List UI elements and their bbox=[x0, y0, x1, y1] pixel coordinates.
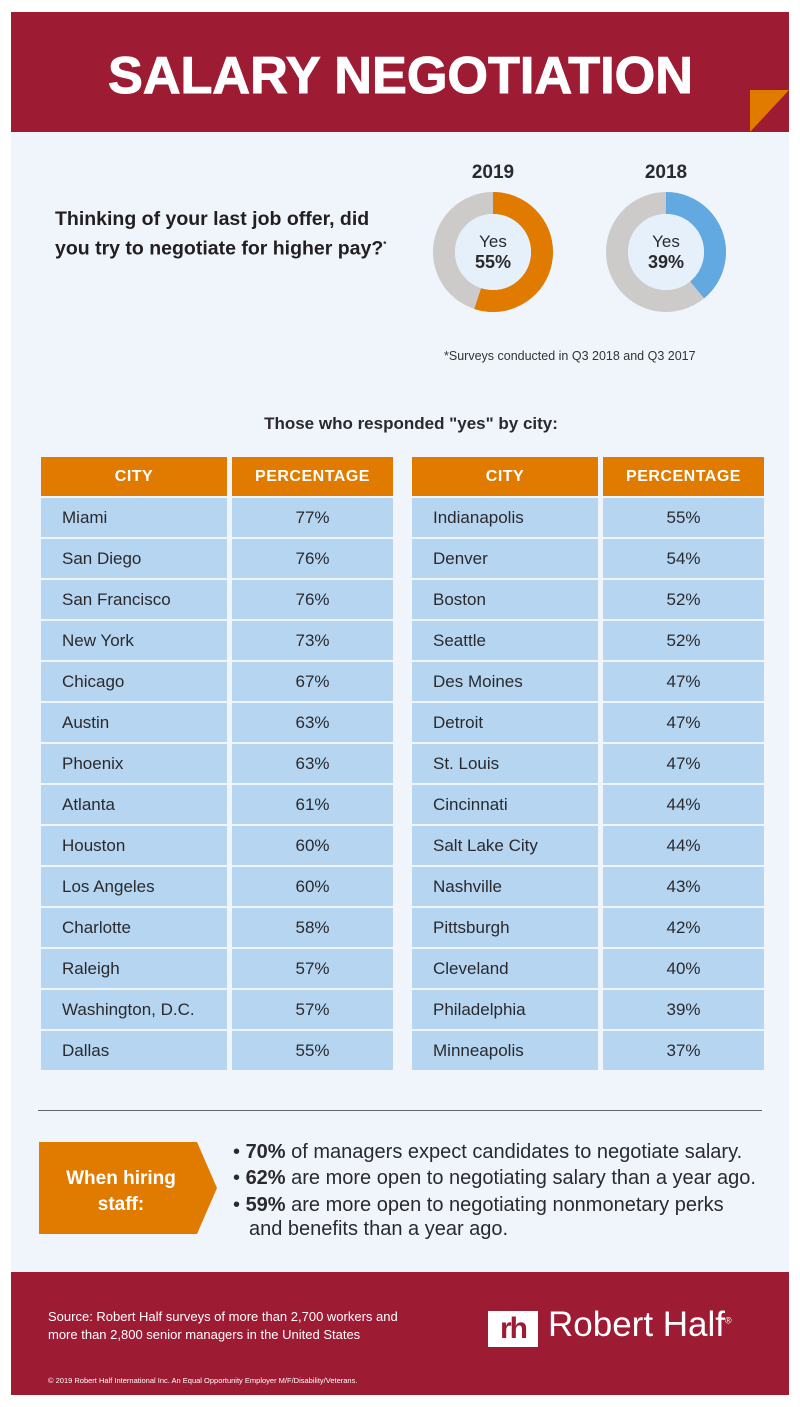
table: right: 52% bbox=[666, 590, 701, 609]
table: right: 40% bbox=[666, 959, 701, 978]
table: right: Boston bbox=[433, 590, 486, 609]
callout: when hiring staff bbox=[39, 1142, 217, 1234]
table: left: 76% bbox=[295, 590, 330, 609]
table: right: 47% bbox=[666, 672, 701, 691]
bullet list: • 62% are more open to negotiating salary than a year ago. bbox=[233, 1167, 756, 1189]
callout: when hiring staff: staff: bbox=[98, 1194, 144, 1215]
table heading: Those who responded "yes" by city: bbox=[264, 414, 558, 433]
table: right: Minneapolis bbox=[433, 1041, 524, 1060]
source text bbox=[48, 1309, 398, 1342]
table: left: Dallas bbox=[62, 1041, 109, 1060]
table: right: 43% bbox=[666, 877, 701, 896]
chart: 2018 donut bbox=[606, 162, 726, 312]
source text: more than 2,800 senior managers in the United States bbox=[48, 1327, 360, 1342]
table: left: 60% bbox=[295, 877, 330, 896]
table: right: Nashville bbox=[433, 877, 502, 896]
source text: Source: Robert Half surveys of more than 2,700 workers and bbox=[48, 1309, 398, 1324]
table: left: PERCENTAGE bbox=[255, 468, 370, 485]
table: left: Austin bbox=[62, 713, 109, 732]
table: right: 44% bbox=[666, 795, 701, 814]
table: left: 55% bbox=[295, 1041, 330, 1060]
header banner bbox=[11, 12, 789, 132]
title: SALARY NEGOTIATION bbox=[108, 47, 693, 105]
table: right: Seattle bbox=[433, 631, 486, 650]
table: right: PERCENTAGE bbox=[626, 468, 741, 485]
table: left: Washington, D.C. bbox=[62, 1000, 195, 1019]
table: left: Atlanta bbox=[62, 795, 115, 814]
copyright: © 2019 Robert Half International Inc. An Equal Opportunity Employer M/F/Disability/Veterans. bbox=[48, 1376, 357, 1385]
logo: rh bbox=[500, 1312, 526, 1345]
chart: 2018 donut: 2018 bbox=[645, 162, 687, 183]
logo: Robert Half® bbox=[548, 1305, 732, 1344]
table: left: 63% bbox=[295, 754, 330, 773]
footnote: *Surveys conducted in Q3 2018 and Q3 2017 bbox=[444, 349, 696, 363]
icon: folded corner bbox=[750, 90, 789, 132]
table: right: CITY bbox=[486, 468, 524, 485]
table: right: 52% bbox=[666, 631, 701, 650]
table: left: Raleigh bbox=[62, 959, 120, 978]
table: right: 39% bbox=[666, 1000, 701, 1019]
table: left: 77% bbox=[295, 508, 330, 527]
bullet list: • 70% of managers expect candidates to negotiate salary. bbox=[233, 1141, 742, 1163]
table: right: 37% bbox=[666, 1041, 701, 1060]
table: right: Pittsburgh bbox=[433, 918, 510, 937]
table: left: CITY bbox=[115, 468, 153, 485]
table: left: 57% bbox=[295, 1000, 330, 1019]
table: right: Philadelphia bbox=[433, 1000, 526, 1019]
table: left bbox=[41, 457, 393, 1070]
question text: you try to negotiate for higher pay?* bbox=[55, 238, 386, 260]
table: right: 42% bbox=[666, 918, 701, 937]
table: left: Phoenix bbox=[62, 754, 123, 773]
bullet list bbox=[233, 1141, 756, 1240]
table: left: 73% bbox=[295, 631, 330, 650]
table: left: Chicago bbox=[62, 672, 124, 691]
table: left: Houston bbox=[62, 836, 125, 855]
table: right: Denver bbox=[433, 549, 488, 568]
table: right: Des Moines bbox=[433, 672, 523, 691]
question text bbox=[55, 208, 386, 260]
table: left: Los Angeles bbox=[62, 877, 155, 896]
chart: 2019 donut: Yes bbox=[479, 232, 507, 251]
table: right: 44% bbox=[666, 836, 701, 855]
logo bbox=[488, 1305, 732, 1347]
table: right bbox=[412, 457, 764, 1070]
table: left: Charlotte bbox=[62, 918, 131, 937]
table: left: Miami bbox=[62, 508, 107, 527]
chart: 2019 donut bbox=[433, 162, 553, 312]
callout: when hiring staff: When hiring bbox=[66, 1168, 176, 1189]
table: right: 55% bbox=[666, 508, 701, 527]
table: right: St. Louis bbox=[433, 754, 499, 773]
table: right: 54% bbox=[666, 549, 701, 568]
table: right: 47% bbox=[666, 754, 701, 773]
chart: 2019 donut: 2019 bbox=[472, 162, 514, 183]
table: left: 67% bbox=[295, 672, 330, 691]
footer bbox=[11, 1272, 789, 1395]
chart: 2018 donut: 39% bbox=[648, 252, 684, 272]
table: right: Salt Lake City bbox=[433, 836, 538, 855]
table: right: Cleveland bbox=[433, 959, 509, 978]
table: left: San Francisco bbox=[62, 590, 171, 609]
bullet list: • 59% are more open to negotiating nonmonetary perks bbox=[233, 1194, 724, 1216]
chart: 2018 donut: Yes bbox=[652, 232, 680, 251]
table: left: 61% bbox=[295, 795, 330, 814]
table: left: San Diego bbox=[62, 549, 141, 568]
bullet list: and benefits than a year ago. bbox=[249, 1218, 508, 1240]
table: left: 76% bbox=[295, 549, 330, 568]
table: left: 63% bbox=[295, 713, 330, 732]
table: right: 47% bbox=[666, 713, 701, 732]
table: left: 58% bbox=[295, 918, 330, 937]
question text: Thinking of your last job offer, did bbox=[55, 208, 369, 230]
table: left: New York bbox=[62, 631, 134, 650]
chart: 2019 donut: 55% bbox=[475, 252, 511, 272]
table: right: Detroit bbox=[433, 713, 483, 732]
table: left: 60% bbox=[295, 836, 330, 855]
table: right: Indianapolis bbox=[433, 508, 524, 527]
table: left: 57% bbox=[295, 959, 330, 978]
table: right: Cincinnati bbox=[433, 795, 508, 814]
